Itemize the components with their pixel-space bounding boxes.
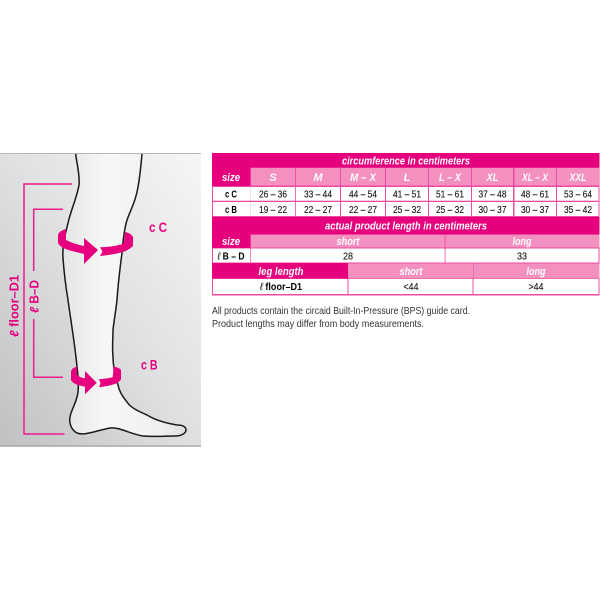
- footnote line 2: Product lengths may differ from body measurements.: [212, 318, 424, 330]
- row: cC: 44 – 54: [349, 189, 377, 201]
- size header row: XXL: [569, 172, 587, 184]
- size header row: XL – X: [521, 172, 549, 184]
- row: floor to D1 length: <44: [404, 281, 419, 293]
- row: cB: 30 – 37: [521, 204, 549, 216]
- size header row: M: [313, 172, 323, 184]
- label: B to D: ℓ B–D: [28, 280, 42, 313]
- leg length header row: long: [526, 266, 546, 278]
- product length header row: [212, 233, 600, 248]
- row: cB: c B: [225, 204, 237, 216]
- circumference heading: circumference in centimeters: [342, 155, 470, 167]
- row: cB: 22 – 27: [304, 204, 332, 216]
- row: B to D length: [213, 248, 598, 262]
- panel background: [0, 153, 201, 446]
- dimension line: B to D: [34, 209, 63, 377]
- panel bottom edge: [0, 446, 201, 447]
- row: floor to D1 length: ℓ floor–D1: [259, 281, 302, 293]
- row: cB: 35 – 42: [564, 204, 592, 216]
- dimension line: floor to D1: [24, 184, 72, 434]
- arrow band: calf: [58, 229, 133, 264]
- product length header row: size: [222, 236, 240, 248]
- size header row: size: [222, 172, 240, 184]
- product length header row: short: [336, 236, 361, 248]
- row: B to D length: ℓ B – D: [217, 250, 245, 262]
- arrow band: ankle: [71, 367, 121, 394]
- panel: leg diagram: [0, 153, 201, 447]
- row: cC: 33 – 44: [304, 189, 332, 201]
- row: cC: 41 – 51: [393, 189, 421, 201]
- leg length header row: leg length: [258, 266, 304, 278]
- row: cC: c C: [225, 189, 237, 201]
- row: cC: [213, 187, 598, 201]
- label: cC: c C: [149, 219, 167, 235]
- size table: [212, 153, 600, 296]
- table frame: [212, 153, 600, 296]
- row: cC: 51 – 61: [436, 189, 464, 201]
- row: cC: 26 – 36: [259, 189, 287, 201]
- row: cC: 37 – 48: [478, 189, 507, 201]
- row: cB: 30 – 37: [478, 204, 507, 216]
- size header row: L – X: [439, 172, 462, 184]
- row: cB: 19 – 22: [259, 204, 287, 216]
- size header row: [212, 168, 599, 186]
- size header row: L: [404, 172, 411, 184]
- product length header row: long: [512, 236, 532, 248]
- product length heading: actual product length in centimeters: [325, 220, 487, 232]
- leg length header row: short: [400, 266, 424, 278]
- row: cB: 22 – 27: [349, 204, 377, 216]
- row: cC: 53 – 64: [564, 189, 592, 201]
- size header row: S: [269, 172, 277, 184]
- row: floor to D1 length: [213, 279, 598, 294]
- leg length header row: [212, 263, 600, 278]
- size header row: XL: [486, 172, 499, 184]
- leg outline: [63, 154, 186, 436]
- footnote: [212, 305, 470, 330]
- row: cC: 48 – 61: [521, 189, 549, 201]
- row: cB: 25 – 32: [393, 204, 421, 216]
- row: cB: [213, 202, 598, 216]
- label: cB: c B: [141, 356, 158, 372]
- footnote line 1: All products contain the circaid Built-In-Pressure (BPS) guide card.: [212, 305, 470, 317]
- row: B to D length: 33: [517, 250, 527, 262]
- size header row: M – X: [350, 172, 377, 184]
- product length heading band: [212, 217, 600, 235]
- panel top edge: [0, 153, 201, 154]
- label: floor to D1: ℓ floor–D1: [8, 275, 22, 337]
- circumference heading band: [212, 153, 600, 168]
- row: floor to D1 length: >44: [528, 281, 544, 293]
- leg illustration: [63, 154, 186, 436]
- row: B to D length: 28: [343, 250, 353, 262]
- row: cB: 25 – 32: [436, 204, 464, 216]
